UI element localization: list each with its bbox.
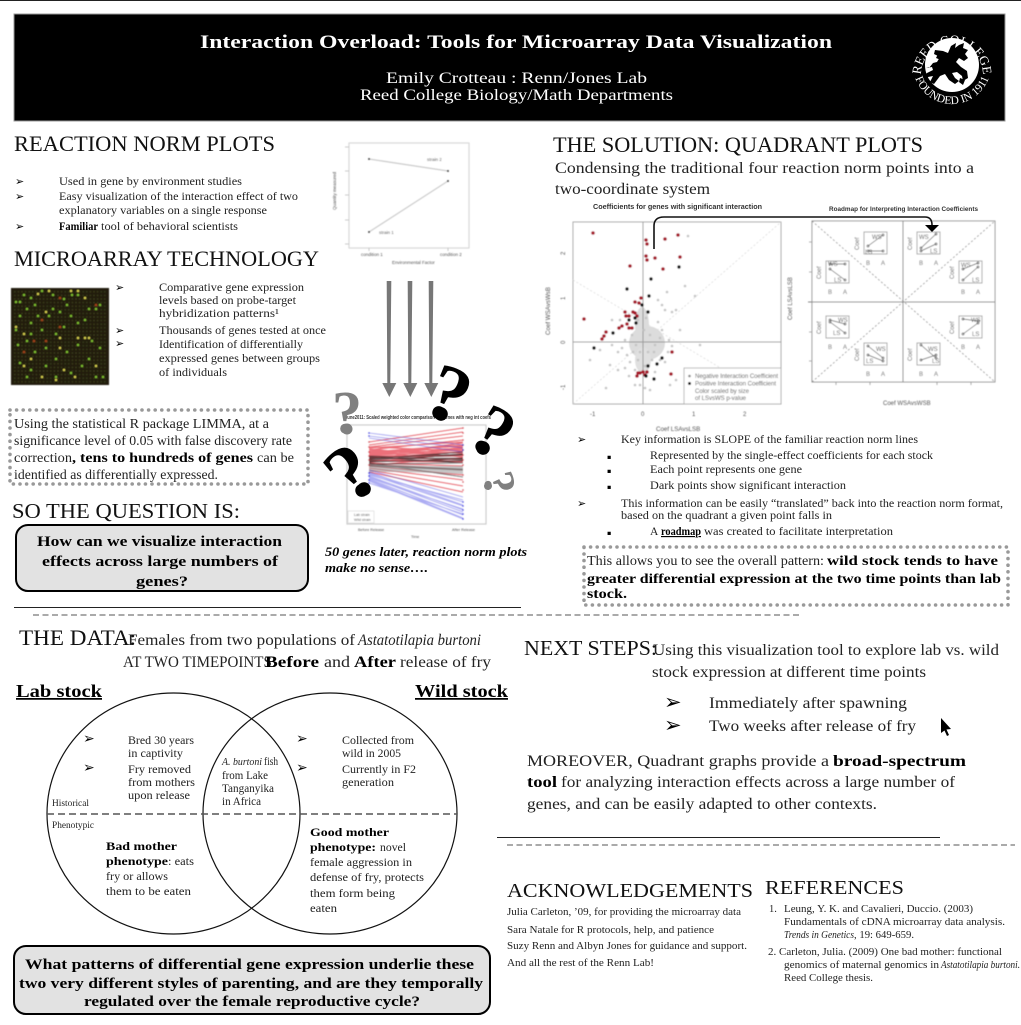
moreover text: broad-spectrum (833, 753, 967, 770)
chart: roadmap for interpreting coefficients: WS (961, 263, 971, 269)
reference list (768, 904, 1020, 984)
data description: Before (265, 654, 319, 671)
chart: roadmap for interpreting coefficients: WS (838, 318, 848, 324)
bullet list: key information: ▪ (607, 483, 611, 491)
bullet list: key information (577, 433, 1003, 538)
good mother phenotype (310, 827, 425, 915)
chart: scatter of coefficients: 2 (561, 251, 567, 255)
reference list: 1. (769, 904, 777, 915)
chart: scatter of coefficients: of LSvsWS p-value (695, 395, 746, 402)
bullet list: Two weeks after release of fry (709, 718, 916, 735)
chart: scatter of coefficients: Coef LSAvsLSB (656, 426, 700, 433)
chart: roadmap for interpreting coefficients: Coef (950, 266, 956, 279)
microarray image (11, 288, 109, 385)
heading: THE SOLUTION: QUADRANT PLOTS (553, 132, 923, 157)
bullet list: hybridization patterns¹ (159, 308, 280, 320)
chart: roadmap for interpreting coefficients: LS (833, 331, 840, 337)
chart: spaghetti reaction norm plot: June2011: Scaled weighted color comparison for genes with neg int coefs (345, 415, 491, 421)
chart: scatter of coefficients: Color scaled by size (695, 388, 749, 395)
chart: roadmap for interpreting coefficients: B (828, 345, 832, 351)
chart: roadmap for interpreting coefficients: A (934, 372, 938, 378)
bullet list: key information: roadmap (661, 526, 701, 538)
bullet list: tool of behavioral scientists (101, 221, 239, 233)
bullet list (664, 690, 916, 737)
bullet list (15, 175, 298, 233)
callout: overall pattern: stock. (587, 587, 627, 602)
bullet list: key information: ▪ (607, 467, 611, 475)
label: wild stock: Wild stock (415, 681, 508, 701)
chart: roadmap for interpreting coefficients: LS (972, 332, 979, 338)
panel: the solution, quadrant plots (545, 132, 1008, 605)
intro text: stock expression at different time points (652, 664, 926, 681)
callout: overall pattern: This allows you to see the overall pattern: (587, 554, 824, 569)
bad mother phenotype: : eats (168, 856, 195, 868)
good mother phenotype: Good mother (310, 827, 389, 839)
wild stock history: Collected from (342, 735, 414, 747)
chart: roadmap for interpreting coefficients: WS (928, 347, 938, 353)
bullet list: levels based on probe-target (159, 295, 297, 307)
subheading: Condensing the traditional four reaction norm points into a (555, 160, 974, 177)
question box: How can we visualize interaction (37, 534, 283, 550)
bullet list: key information: Dark points show significant interaction (650, 480, 846, 492)
shared history (221, 756, 278, 808)
caption: 50 genes later: 50 genes later, reaction norm plots (325, 544, 527, 559)
intro text: Using this visualization tool to explore lab vs. wild (653, 642, 999, 659)
caption: 50 genes later (325, 544, 527, 575)
shared history: A. burtoni (221, 757, 262, 768)
bullet list: Thousands of genes tested at once (159, 325, 326, 337)
chart: roadmap for interpreting coefficients: LS (972, 278, 979, 284)
reference list: Trends in Genetics (784, 930, 854, 941)
bullet list: key information: ➢ (577, 497, 586, 510)
acknowledgement lines: Suzy Renn and Albyn Jones for guidance and support. (507, 941, 747, 952)
reference list: Reed College thesis. (784, 973, 873, 984)
wild stock history: ➢ (296, 760, 308, 776)
wild stock history: wild in 2005 (342, 748, 401, 760)
chart: scatter of coefficients: Coef WSAvsWsB (545, 287, 552, 335)
panel: reaction norm plots (14, 131, 469, 265)
moreover text: for analyzing interaction effects across a large number of (561, 774, 956, 791)
chart: roadmap for interpreting coefficients: A (843, 290, 847, 296)
heading: THE DATA: (19, 625, 136, 650)
shared history: fish (264, 756, 278, 768)
chart: scatter of coefficients: -1 (590, 412, 596, 418)
reaction norm line chart: condition 1 (361, 252, 383, 257)
chart: roadmap for interpreting coefficients: LS (930, 249, 937, 255)
panel: references (765, 877, 1020, 984)
lab stock history: upon release (128, 790, 190, 802)
bullet list: key information: was created to facilitate interpretation (704, 526, 893, 538)
chart: roadmap for interpreting coefficients: A (934, 261, 938, 267)
reference list: , 19: 649-659. (854, 930, 914, 941)
heading: NEXT STEPS: (524, 636, 657, 660)
question box: two very different styles of parenting, and are they temporally (19, 976, 484, 992)
bullet list: ➢ (664, 713, 682, 737)
lab stock history: ➢ (83, 760, 95, 776)
chart: roadmap for interpreting coefficients: B (828, 290, 832, 296)
intro text (652, 642, 999, 681)
callout: LIMMA: correction (14, 451, 72, 466)
bullet list: Immediately after spawning (709, 695, 907, 712)
author line: Emily Crotteau : Renn/Jones Lab (386, 70, 647, 87)
chart: scatter of coefficients: 1 (561, 296, 567, 300)
bullet list: ➢ (15, 190, 24, 203)
chart: roadmap for interpreting coefficients: A (976, 345, 980, 351)
reaction norm line chart: strain 1 (379, 230, 394, 235)
bad mother phenotype: them to be eaten (106, 886, 191, 898)
chart: spaghetti reaction norm plot: Lab strain (354, 513, 370, 517)
lab stock history: Fry removed (128, 764, 191, 776)
bullet list: key information: ▪ (607, 453, 611, 461)
bullet list (115, 281, 326, 379)
acknowledgement lines: Julia Carleton, ’09, for providing the microarray data (507, 907, 741, 918)
chart: roadmap for interpreting coefficients: Coef (908, 348, 914, 361)
chart: roadmap for interpreting coefficients: Coef (817, 266, 823, 279)
bullet list: expressed genes between groups (159, 353, 321, 365)
bullet list: ➢ (115, 337, 124, 350)
good mother phenotype: female aggression in (310, 857, 412, 869)
lab stock history (83, 731, 196, 802)
callout: LIMMA: can be (257, 451, 294, 466)
chart: roadmap for interpreting coefficients: Coef (817, 321, 823, 334)
callout: LIMMA: Using the statistical R package LIMMA, at a (14, 417, 270, 432)
bullet list: of individuals (159, 367, 228, 379)
callout: LIMMA: identified as differentially expressed. (14, 468, 218, 483)
panel: the data (14, 625, 508, 1014)
data description: Astatotilapia burtoni (357, 632, 481, 649)
shared history: Tanganyika (222, 783, 274, 795)
bullet list: key information: Each point represents one gene (650, 464, 802, 476)
chart: scatter of coefficients: Positive Interaction Coefficient (695, 380, 776, 388)
panel: microarray technology (10, 246, 326, 484)
chart: roadmap for interpreting coefficients: Coef LSAvsLSB (788, 277, 794, 320)
bullet list: key information: based on the quadrant a given point falls in (621, 510, 832, 522)
chart: roadmap for interpreting coefficients: WS (971, 318, 981, 324)
bullet list: ➢ (115, 281, 124, 294)
bullet list: ➢ (664, 690, 682, 714)
bullet list: ➢ (15, 175, 24, 188)
shared history: in Africa (222, 796, 261, 808)
question box (16, 525, 308, 591)
icons: scattered question marks: ? (332, 380, 362, 446)
acknowledgement lines: And all the rest of the Renn Lab! (507, 958, 654, 969)
reaction norm line chart: strain 2 (427, 157, 442, 162)
chart: scatter of coefficients: 0 (561, 340, 567, 344)
wild stock history: Currently in F2 (342, 764, 416, 776)
data description: and (324, 654, 350, 671)
chart: roadmap for interpreting coefficients: WS (872, 235, 882, 241)
arrow: scatter to roadmap (654, 217, 939, 249)
chart: roadmap for interpreting coefficients: A (881, 261, 885, 267)
bullet list: Familiar (59, 221, 98, 233)
reaction norm line chart: Quantity measured (332, 171, 337, 210)
chart: spaghetti reaction norm plot: Before Release (358, 528, 384, 532)
question box: regulated over the female reproductive cycle? (84, 994, 420, 1010)
chart: roadmap for interpreting coefficients: Coef WSAvsWSB (883, 401, 931, 407)
chart: spaghetti reaction norm plot: Wild strain (354, 518, 371, 522)
arrows: three grey down arrows (382, 281, 438, 397)
bullet list: Comparative gene expression (159, 282, 304, 294)
reference list: Leung, Y. K. and Cavalieri, Duccio. (2003) (784, 904, 974, 915)
acknowledgement lines: Sara Natale for R protocols, help, and patience (507, 925, 714, 936)
panel: next steps (524, 636, 999, 813)
chart: roadmap for interpreting coefficients: WS (828, 262, 838, 268)
chart: roadmap for interpreting coefficients: B (866, 372, 870, 378)
bullet list: key information: Key information is SLOPE of the familiar reaction norm lines (621, 434, 919, 446)
bad mother phenotype: Bad mother (106, 841, 177, 853)
chart: roadmap for interpreting coefficients: B (961, 290, 965, 296)
callout: LIMMA (10, 410, 308, 484)
bullet list: ➢ (115, 324, 124, 337)
heading: ACKNOWLEDGEMENTS (507, 880, 753, 902)
icons: scattered question marks: ? (308, 426, 394, 519)
heading: REACTION NORM PLOTS (14, 131, 275, 156)
chart: scatter of coefficients: 2 (743, 412, 747, 418)
chart: roadmap for interpreting coefficients: B (961, 345, 965, 351)
bullet list: key information: ➢ (577, 433, 586, 446)
bullet list: key information: A (650, 526, 659, 538)
chart: roadmap for interpreting coefficients: B (866, 261, 870, 267)
chart: roadmap for interpreting coefficients: LS (834, 278, 841, 284)
question box (14, 946, 490, 1014)
label: historical: Historical (52, 799, 89, 809)
callout: LIMMA: significance level of 0.05 with false discovery rate (14, 434, 292, 449)
bullet list: Easy visualization of the interaction effect of two (59, 191, 298, 203)
chart: roadmap for interpreting coefficients: A (881, 372, 885, 378)
label: phenotypic: Phenotypic (52, 821, 94, 831)
callout: overall pattern: wild stock tends to have (827, 554, 998, 569)
chart: roadmap for interpreting coefficients: LS (865, 250, 872, 256)
chart: scatter of coefficients: Coefficients for genes with significant interaction (593, 202, 762, 211)
good mother phenotype: novel (380, 842, 406, 854)
bullet list: key information: This information can be easily “translated” back into the reaction norm format, (621, 498, 1003, 510)
chart: roadmap for interpreting coefficients (788, 206, 995, 407)
chart: roadmap for interpreting coefficients: A (976, 290, 980, 296)
data description (123, 632, 491, 671)
shared history: from Lake (222, 770, 268, 782)
icons: scattered question marks: ? (457, 388, 530, 475)
chart: roadmap for interpreting coefficients: Coef (855, 237, 861, 250)
department line: Reed College Biology/Math Departments (360, 87, 673, 104)
good mother phenotype: phenotype: (310, 842, 376, 854)
bullet list: ➢ (15, 220, 24, 233)
bullet list: key information: ▪ (607, 529, 611, 537)
good mother phenotype: defense of fry, protects (310, 872, 425, 884)
bullet list: Used in gene by environment studies (59, 176, 243, 188)
subheading: two-coordinate system (555, 181, 711, 198)
wild stock history: generation (342, 777, 394, 789)
bullet list: key information: Represented by the single-effect coefficients for each stock (650, 450, 933, 462)
chart: scatter of coefficients (545, 202, 781, 433)
icon: mouse cursor (941, 718, 951, 736)
heading: MICROARRAY TECHNOLOGY (14, 246, 319, 271)
icons: scattered question marks: ? (414, 346, 484, 443)
reaction norm line chart: Environmental Factor (392, 260, 435, 265)
icons: scattered question marks: ? (473, 466, 526, 500)
reaction norm line chart (332, 143, 469, 265)
data description: release of fry (400, 654, 491, 671)
moreover text: tool (527, 774, 558, 791)
callout: overall pattern (584, 547, 1008, 605)
chart: roadmap for interpreting coefficients: B (919, 261, 923, 267)
chart: spaghetti reaction norm plot: After Release (452, 528, 475, 532)
chart: scatter of coefficients: -1 (561, 384, 567, 390)
callout: overall pattern: greater differential expression at the two time points than lab (587, 572, 1001, 587)
lab stock history: from mothers (128, 777, 196, 789)
lab stock history: ➢ (83, 731, 95, 747)
good mother phenotype: eaten (310, 903, 337, 915)
venn diagram (47, 693, 457, 934)
chart: scatter of coefficients: 1 (692, 412, 696, 418)
reference list: 2. Carleton, Julia. (2009) One bad mother: functional (768, 947, 1002, 958)
question box: genes? (136, 574, 188, 590)
reaction norm line chart: condition 2 (440, 252, 462, 257)
moreover text (527, 753, 967, 813)
chart: roadmap for interpreting coefficients: LS (866, 359, 873, 365)
icons: scattered question marks (308, 346, 530, 519)
wild stock history: ➢ (296, 731, 308, 747)
icon: Reed College seal (912, 36, 992, 104)
chart: spaghetti reaction norm plot (345, 415, 491, 539)
chart: roadmap for interpreting coefficients: A (843, 345, 847, 351)
chart: roadmap for interpreting coefficients: WS (919, 235, 929, 241)
reference list: Fundamentals of cDNA microarray data analysis. (784, 917, 1005, 928)
chart: roadmap for interpreting coefficients: Roadmap for Interpreting Interaction Coefficients (829, 206, 978, 213)
good mother phenotype: them form being (310, 888, 395, 900)
question box: effects across large numbers of (42, 554, 279, 570)
chart: roadmap for interpreting coefficients: LS (932, 359, 939, 365)
chart: roadmap for interpreting coefficients: WS (876, 347, 886, 353)
lab stock history: in captivity (128, 748, 183, 760)
panel: so the question is (12, 499, 308, 591)
label: lab stock: Lab stock (16, 681, 102, 701)
icon: Reed College seal: REED COLLEGE (912, 36, 992, 74)
data description: Females from two populations of (128, 632, 356, 649)
data description: After (354, 654, 396, 671)
panel: acknowledgements (507, 880, 753, 969)
heading: SO THE QUESTION IS: (12, 499, 240, 523)
chart: scatter of coefficients: 0 (641, 412, 645, 418)
title: Interaction Overload: Tools for Microarray Data Visualization (200, 32, 833, 53)
bad mother phenotype: fry or allows (106, 871, 169, 883)
chart: roadmap for interpreting coefficients: Coef (950, 321, 956, 334)
wild stock history (296, 731, 416, 789)
heading: REFERENCES (765, 877, 904, 899)
bad mother phenotype: phenotype (106, 856, 168, 868)
chart: scatter of coefficients: Negative Interaction Coefficient (695, 373, 778, 380)
icon: Reed College seal: FOUNDED IN 1911 (915, 75, 988, 104)
lab stock history: Bred 30 years (128, 735, 195, 747)
acknowledgement lines (507, 907, 747, 969)
subheading (555, 160, 974, 198)
bullet list: explanatory variables on a single response (59, 205, 267, 217)
header banner (14, 14, 1006, 122)
data description: AT TWO TIMEPOINTS: (123, 654, 276, 671)
moreover text: genes, and can be easily adapted to other contexts. (527, 796, 877, 813)
reference list: genomics of maternal genomics in (784, 960, 940, 971)
chart: spaghetti reaction norm plot: Time (411, 535, 419, 539)
bad mother phenotype (106, 841, 195, 898)
bullet list: Identification of differentially (159, 339, 303, 351)
chart: roadmap for interpreting coefficients: B (919, 372, 923, 378)
chart: roadmap for interpreting coefficients: Coef (855, 348, 861, 361)
moreover text: MOREOVER, Quadrant graphs provide a (527, 753, 829, 770)
question box: What patterns of differential gene expression underlie these (25, 957, 474, 973)
callout: LIMMA: , tens to hundreds of genes (72, 451, 254, 466)
caption: 50 genes later: make no sense…. (325, 560, 428, 575)
chart: roadmap for interpreting coefficients: Coef (908, 237, 914, 250)
